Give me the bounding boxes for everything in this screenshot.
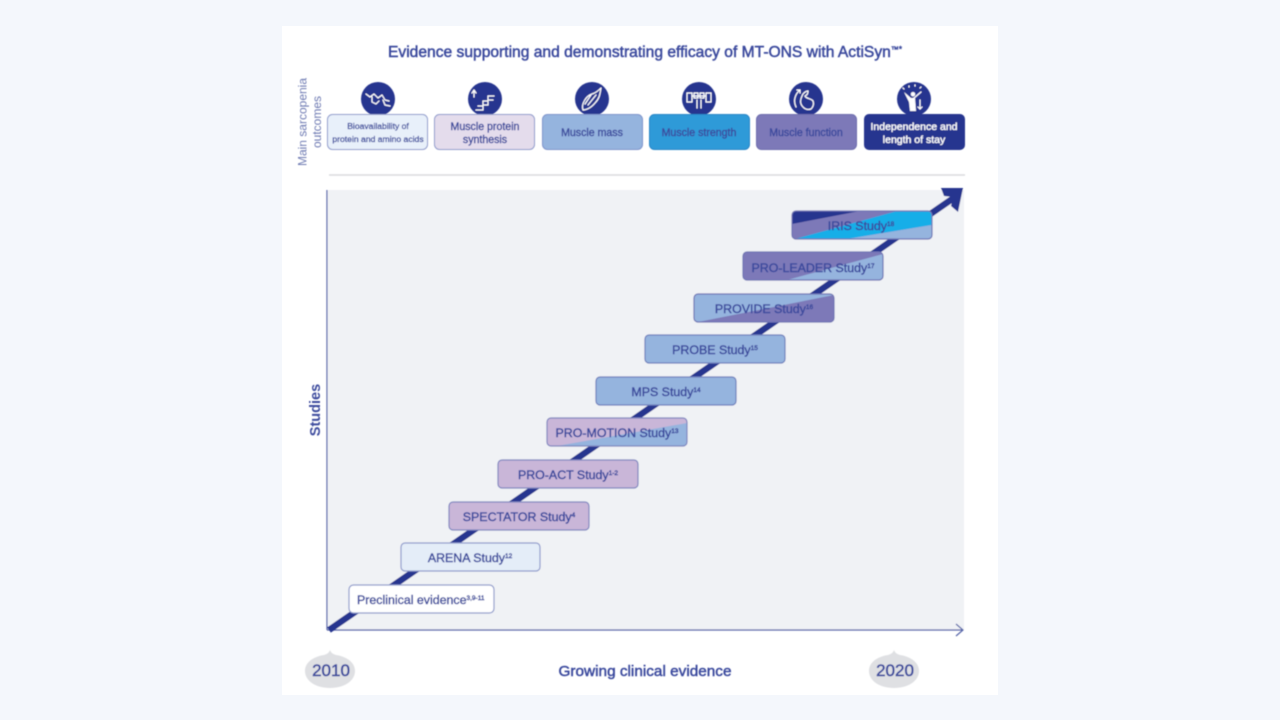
outcome: muscle protein synthesis <box>434 82 534 150</box>
study: ARENA <box>401 543 540 571</box>
growth arrow <box>329 188 963 630</box>
study: IRIS <box>792 211 932 239</box>
study: PRO-ACT: PRO-ACT Study <box>518 468 609 482</box>
year marker: 2010: 2010 <box>312 661 350 680</box>
study: PROBE <box>645 335 785 363</box>
study: PROVIDE: PROVIDE Study <box>715 302 806 316</box>
year marker: 2010 <box>305 650 355 688</box>
axis label: studies: Studies <box>308 384 324 436</box>
study: PRO-MOTION: PRO-MOTION Study <box>556 426 671 440</box>
study: PROBE: 15 <box>751 345 758 352</box>
outcome: muscle protein synthesis: synthesis <box>463 134 507 146</box>
study: MPS: MPS Study <box>631 385 693 399</box>
study: MPS <box>596 377 736 405</box>
axis label: main sarcopenia outcomes: Main sarcopenia <box>296 78 310 166</box>
study: PRO-ACT <box>498 460 638 488</box>
axis label: main sarcopenia outcomes: outcomes <box>310 96 324 148</box>
outcome: muscle mass <box>542 82 642 150</box>
outcome: bioavailability <box>328 82 428 150</box>
year marker: 2020: 2020 <box>876 661 914 680</box>
study: PROBE: PROBE Study <box>672 343 751 357</box>
outcome: muscle function: Muscle function <box>769 127 843 139</box>
title: Evidence supporting and demonstrating efficacy of MT-ONS with ActiSyn <box>388 44 887 61</box>
outcome: muscle strength: Muscle strength <box>662 127 736 139</box>
study: PRO-ACT: 1-2 <box>609 470 618 477</box>
outcome: independence and length of stay: Independence and <box>870 121 958 133</box>
outcome: bioavailability: protein and amino acids <box>332 134 424 144</box>
study: MPS: 14 <box>693 387 701 394</box>
study: ARENA: 12 <box>505 553 513 560</box>
axis label: main sarcopenia outcomes <box>296 78 324 166</box>
outcome: independence and length of stay: length of stay <box>883 134 946 146</box>
panel: infographic card <box>282 26 998 695</box>
outcome: independence and length of stay <box>864 82 965 150</box>
study: PRO-MOTION <box>547 418 687 446</box>
year marker: 2020 <box>869 650 919 688</box>
study: PRO-LEADER: 17 <box>867 263 875 270</box>
study: PROVIDE: 16 <box>806 304 813 311</box>
study: IRIS: IRIS Study <box>828 219 887 233</box>
outcome: muscle mass: Muscle mass <box>561 127 623 139</box>
x-axis label: Growing clinical evidence <box>558 663 732 680</box>
outcome: muscle function <box>756 82 856 150</box>
study: SPECTATOR: 4 <box>572 512 576 519</box>
outcome: bioavailability: Bioavailability of <box>347 121 409 131</box>
study: PROVIDE <box>694 294 834 322</box>
study: preclinical evidence <box>349 585 494 613</box>
study: PRO-MOTION: 13 <box>671 428 679 435</box>
panel: chart background <box>328 190 964 630</box>
vertical axis <box>326 190 328 630</box>
horizontal axis arrow <box>327 624 963 636</box>
title: ™* <box>891 45 902 54</box>
outcome: muscle strength <box>650 82 750 150</box>
study: IRIS: 18 <box>887 221 895 228</box>
outcome: muscle protein synthesis: Muscle protein <box>451 121 520 133</box>
study: ARENA: ARENA Study <box>428 551 505 565</box>
study: preclinical evidence: 3,9-11 <box>467 595 485 602</box>
study: SPECTATOR <box>449 502 589 530</box>
study: SPECTATOR: SPECTATOR Study <box>463 510 572 524</box>
study: PRO-LEADER: PRO-LEADER Study <box>752 261 867 275</box>
study: preclinical evidence: Preclinical evidence <box>357 593 467 607</box>
study: PRO-LEADER <box>743 252 883 280</box>
